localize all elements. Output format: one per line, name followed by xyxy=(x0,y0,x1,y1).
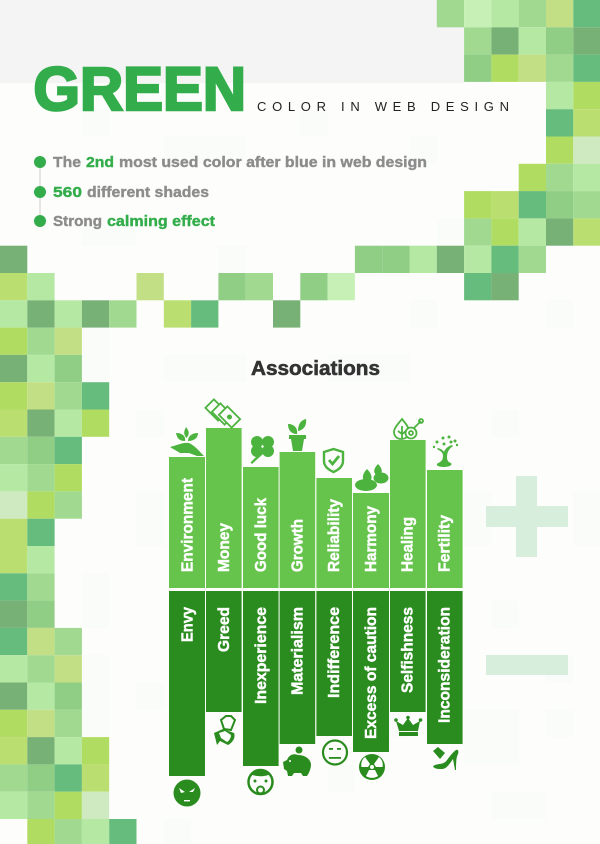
chart: negative associations: Indifference xyxy=(326,607,343,698)
icon: piggy bank xyxy=(283,746,311,776)
top grey band xyxy=(0,0,464,83)
bullet list: The xyxy=(53,154,81,171)
bullet list: 2nd xyxy=(86,154,114,171)
chart: negative associations xyxy=(169,591,463,776)
bullet list: most used color after blue in web design xyxy=(119,154,427,171)
icon: shield with check xyxy=(324,449,343,472)
decorative minus xyxy=(486,655,568,675)
icon: herbal healing xyxy=(394,419,423,439)
icon: envy face xyxy=(174,780,200,806)
icon: candles xyxy=(355,464,388,491)
decorative plus xyxy=(486,476,568,557)
icon: four leaf clover xyxy=(250,436,274,464)
chart: negative associations: Materialism xyxy=(290,607,306,695)
icon: tree xyxy=(433,436,458,467)
chart: negative associations: Selfishness xyxy=(400,607,416,693)
icon: high heel and tag xyxy=(433,747,458,770)
chart: positive associations: Harmony xyxy=(363,506,380,572)
pixel mosaic: top right xyxy=(355,0,600,300)
chart: positive associations: Fertility xyxy=(436,515,454,572)
bullet list: different shades xyxy=(87,184,209,201)
chart: negative associations: Inexperience xyxy=(253,607,270,704)
bullet list: Strong xyxy=(53,213,102,230)
heading: associations: Associations xyxy=(251,357,380,380)
icon: banknotes xyxy=(205,399,240,428)
chart: positive associations xyxy=(169,428,463,588)
title: GREEN xyxy=(34,55,246,123)
pale background pixels xyxy=(82,109,600,844)
icon: radiation symbol xyxy=(359,754,385,780)
chart: negative associations: Envy xyxy=(180,607,196,642)
pixel mosaic: left side xyxy=(0,246,355,844)
icon: crown xyxy=(394,716,422,736)
chart: negative associations: Greed xyxy=(216,607,233,652)
chart: positive associations: Environment xyxy=(180,478,196,572)
bullet list: calming effect xyxy=(107,213,215,230)
icon: baby face xyxy=(248,770,272,794)
chart: positive associations: Money xyxy=(216,523,233,572)
icon: potted plant xyxy=(288,419,306,451)
icon: hand with leaves xyxy=(170,427,204,456)
chart: negative associations: Excess of caution xyxy=(363,607,380,739)
bullet list xyxy=(34,154,427,230)
chart: positive associations: Good luck xyxy=(253,498,270,572)
icon: indifferent face xyxy=(323,740,347,764)
subtitle: COLOR IN WEB DESIGN xyxy=(257,99,509,114)
bullet list: 560 xyxy=(53,184,82,201)
chart: positive associations: Healing xyxy=(400,517,416,572)
chart: positive associations: Growth xyxy=(290,519,306,572)
chart: positive associations: Reliability xyxy=(326,499,343,572)
icon: money bag xyxy=(214,716,235,745)
chart: negative associations: Inconsideration xyxy=(436,607,454,723)
